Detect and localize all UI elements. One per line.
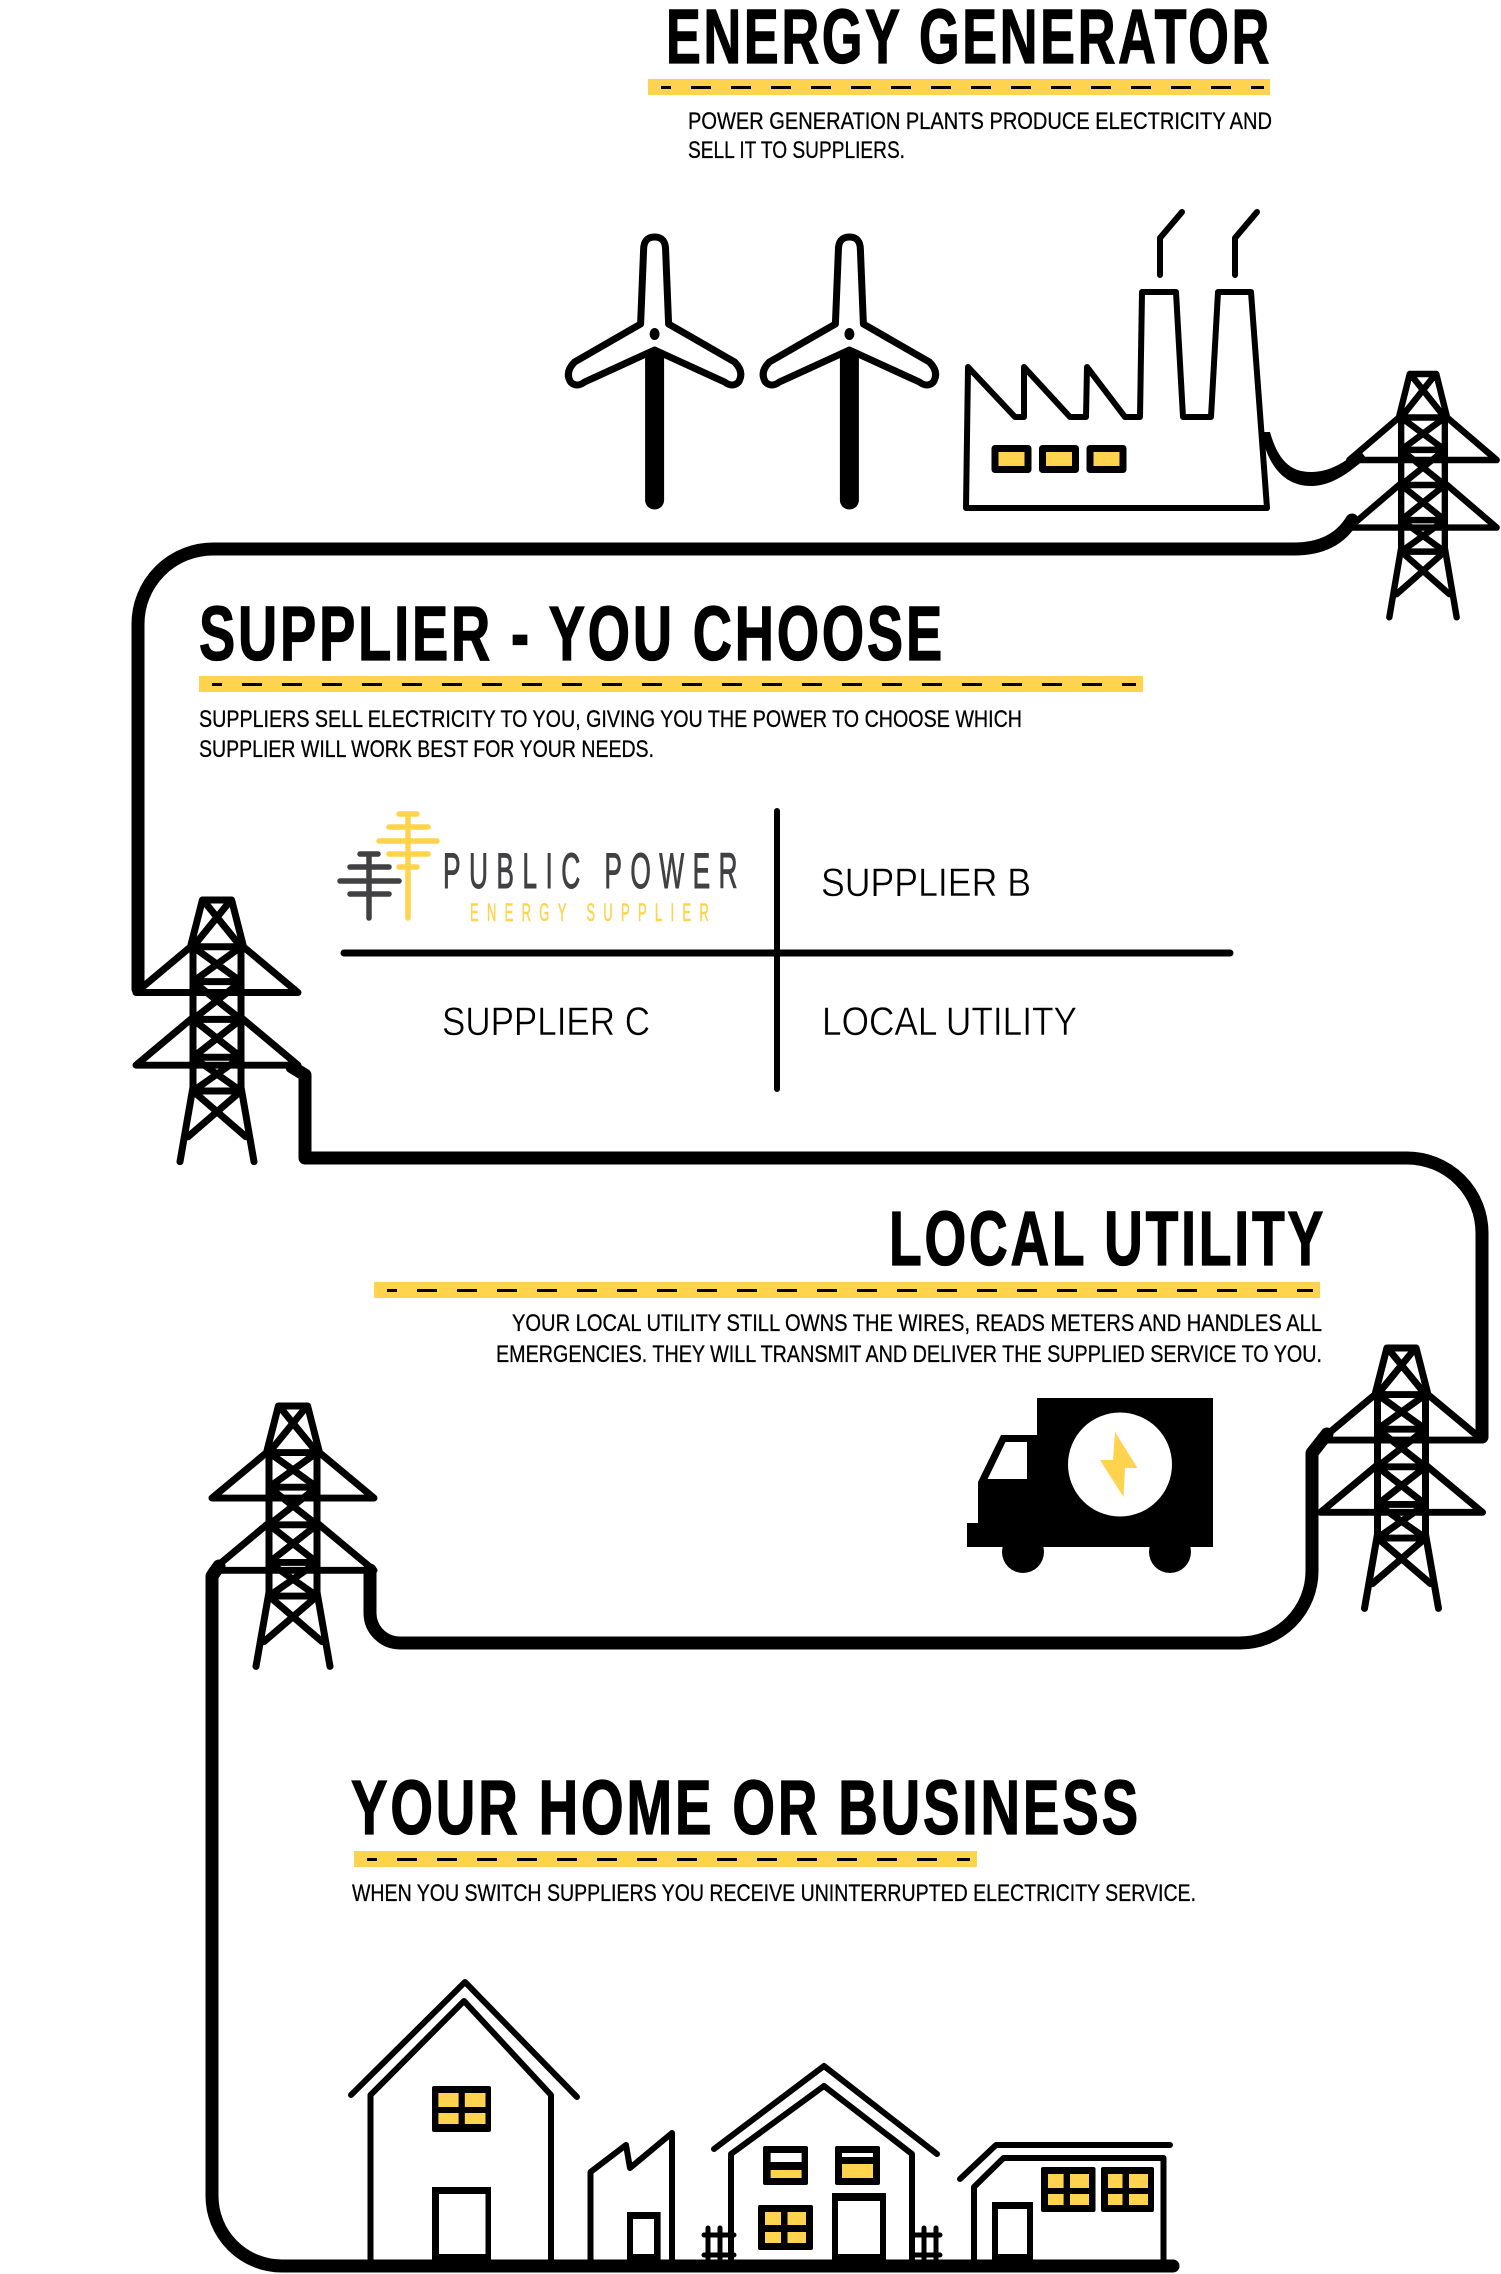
icon: small shed (590, 2133, 672, 2260)
icon: fence left (704, 2228, 734, 2260)
wire: supplier to local utility (292, 1067, 1482, 1437)
heading: local utility: LOCAL UTILITY (889, 1196, 1326, 1282)
road divider: your home (354, 1851, 977, 1867)
text: local utility description (496, 1310, 1322, 1368)
text: local utility description: EMERGENCIES. THEY WILL TRANSMIT AND DELIVER THE SUPPLIED SERVICE TO YOU. (496, 1341, 1322, 1368)
road divider: supplier (199, 676, 1143, 692)
icon: family house (714, 2066, 937, 2260)
icon: fence right (912, 2228, 940, 2260)
icon: wind turbine 1 (568, 237, 741, 500)
icon: pylon left (136, 900, 298, 1162)
icon: pylon lower left (212, 1406, 374, 1666)
heading: your home or business: YOUR HOME OR BUSINESS (351, 1765, 1141, 1851)
label: local utility: LOCAL UTILITY (822, 1000, 1077, 1044)
icon: pylon right (1320, 1348, 1482, 1608)
wire: generator to supplier (138, 520, 1352, 989)
icon: pylon top right (1349, 374, 1497, 617)
text: your home description: WHEN YOU SWITCH SUPPLIERS YOU RECEIVE UNINTERRUPTED ELECTRICITY SERVICE. (352, 1880, 1196, 1907)
logo: public power: PUBLIC POWER (443, 843, 746, 899)
heading: supplier: SUPPLIER - YOU CHOOSE (199, 591, 945, 677)
supplier grid (340, 811, 1230, 1089)
label: supplier b: SUPPLIER B (821, 861, 1031, 905)
logo: public power: ENERGY SUPPLIER (470, 899, 717, 927)
icon: business building (960, 2145, 1170, 2260)
wire: home street line (212, 1566, 1173, 2266)
text: energy generator description (688, 108, 1272, 164)
logo: public power (340, 814, 746, 927)
icon: utility truck (967, 1398, 1213, 1573)
wire: local utility to home (370, 1434, 1327, 1643)
text: local utility description: YOUR LOCAL UTILITY STILL OWNS THE WIRES, READS METERS AND HANDLES ALL (512, 1310, 1322, 1337)
road divider: energy generator (648, 79, 1270, 95)
text: energy generator description: POWER GENERATION PLANTS PRODUCE ELECTRICITY AND (688, 108, 1272, 135)
icon: factory (966, 212, 1267, 508)
text: supplier description (199, 706, 1022, 763)
road divider: local utility (374, 1282, 1320, 1298)
icon: tall house (351, 1982, 577, 2260)
icon: wind turbine 2 (763, 237, 936, 500)
text: supplier description: SUPPLIERS SELL ELECTRICITY TO YOU, GIVING YOU THE POWER TO CHOOSE WHICH (199, 706, 1022, 733)
wire: factory to pylon (1261, 432, 1366, 486)
text: energy generator description: SELL IT TO SUPPLIERS. (688, 137, 905, 164)
label: supplier c: SUPPLIER C (442, 1000, 650, 1044)
text: supplier description: SUPPLIER WILL WORK BEST FOR YOUR NEEDS. (199, 736, 654, 763)
